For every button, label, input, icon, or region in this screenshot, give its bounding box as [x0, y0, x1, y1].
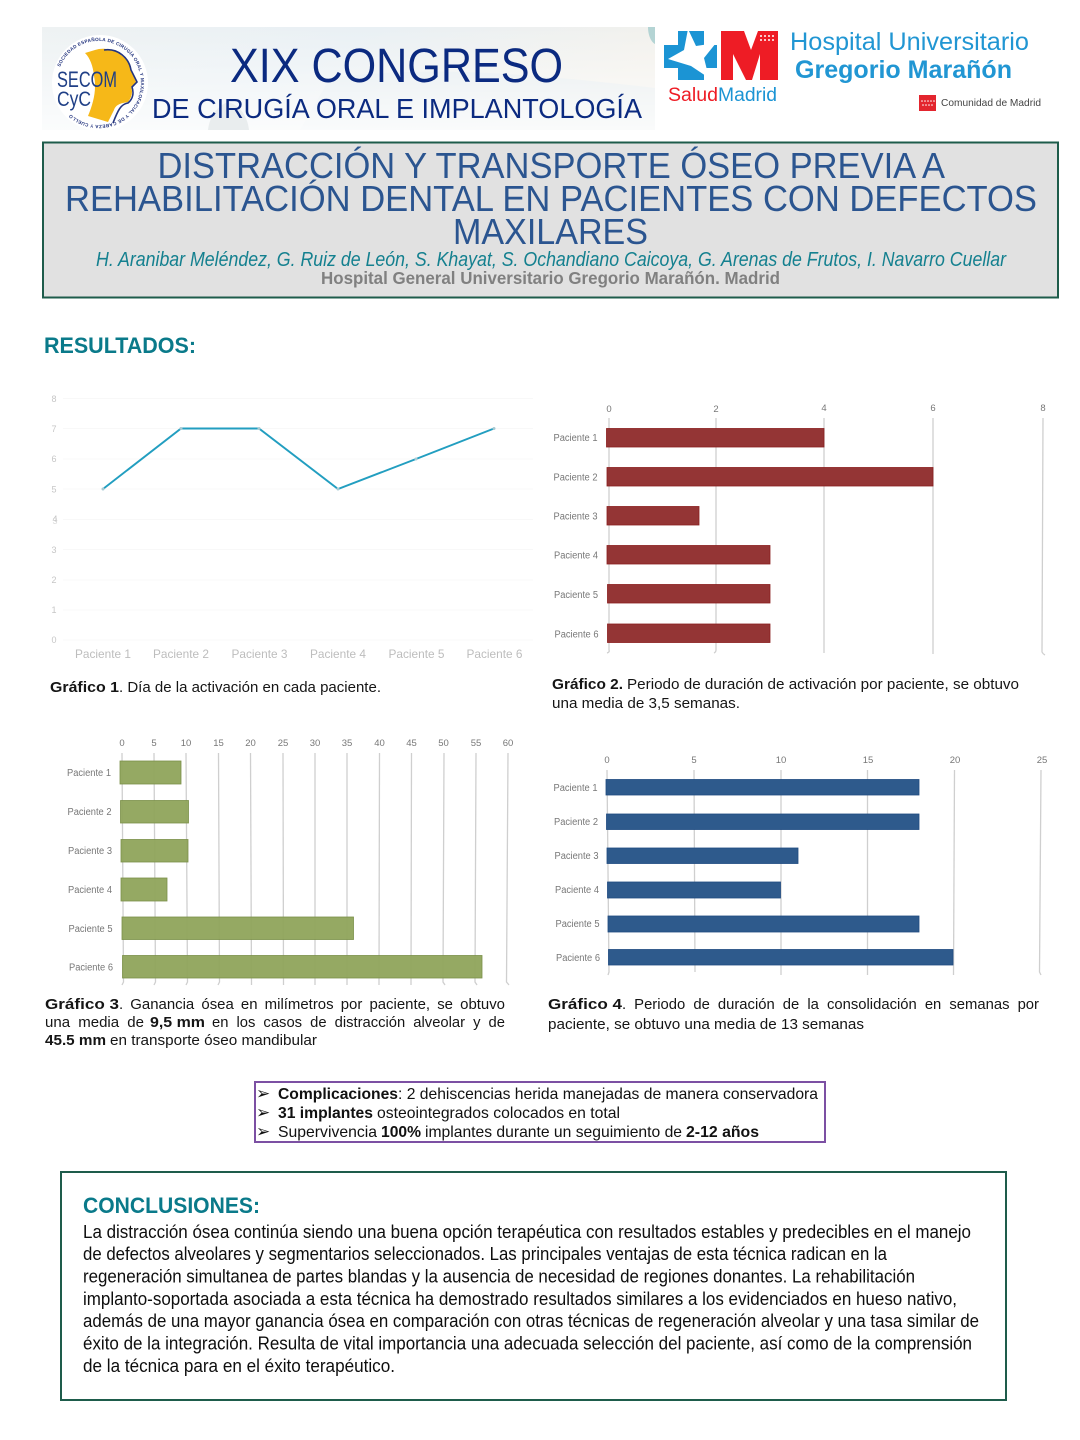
logo: SECOM CyC: CyC — [57, 88, 91, 111]
poster title: REHABILITACIÓN DENTAL EN PACIENTES CON DEFECTOS — [65, 178, 1037, 219]
Comunidad de Madrid logo — [919, 95, 1041, 111]
bar chart: duración de activación: Paciente 2 — [554, 472, 598, 484]
bullet line: complicaciones: : 2 dehiscencias herida manejadas de manera conservadora — [398, 1086, 818, 1103]
banner subtitle: DE CIRUGÍA ORAL E IMPLANTOLOGÍA — [152, 93, 642, 124]
bullet line: complicaciones: ➢ — [256, 1084, 270, 1104]
bar chart: ganancia ósea: Paciente 4 — [68, 885, 113, 896]
bullet line: supervivencia: 2-12 años — [686, 1124, 759, 1141]
caption: gráfico 3: Gráfico 3 — [45, 996, 119, 1013]
bar chart: ganancia ósea — [67, 738, 513, 985]
conclusions text: implanto-soportada asociada a esta técnica ha demostrado resultados similares a los evidenciados en hueso nativo, — [83, 1289, 957, 1309]
line chart: día de activación: Paciente 3 — [232, 647, 288, 661]
bar chart: ganancia ósea: 35 — [342, 738, 352, 749]
line chart: día de activación: Paciente 4 — [310, 647, 366, 661]
line chart: día de activación: 1 — [51, 605, 57, 615]
conclusions text: La distracción ósea continúa siendo una buena opción terapéutica con resultados estables y predecibles en el manejo — [83, 1222, 971, 1242]
caption: gráfico 2: Gráfico 2. — [552, 676, 623, 693]
Comunidad de Madrid logo: Comunidad de Madrid — [941, 97, 1041, 109]
bar chart: duración de activación — [554, 403, 1046, 655]
bar chart: ganancia ósea: 45 — [406, 738, 417, 749]
caption: gráfico 3 — [45, 996, 505, 1049]
bar chart: duración de consolidación: 10 — [776, 755, 786, 766]
poster title — [65, 145, 1037, 252]
hospital name — [790, 28, 1029, 84]
bar chart: ganancia ósea: 5 — [151, 738, 157, 749]
heading: resultados: RESULTADOS: — [44, 333, 196, 358]
caption: gráfico 2 — [552, 676, 1019, 712]
bar chart: duración de activación: Paciente 6 — [554, 630, 599, 640]
line chart: día de activación: Paciente 6 — [466, 647, 523, 661]
line chart: día de activación: 4 — [52, 514, 58, 524]
conclusions text: regeneración simultanea de partes blandas y la ausencia de necesidad de regiones donantes. La rehabilitación — [83, 1266, 915, 1286]
caption: gráfico 4: Gráfico 4 — [548, 996, 623, 1013]
caption: gráfico 4 — [548, 996, 1039, 1033]
bar chart: ganancia ósea: 15 — [213, 738, 224, 749]
bullet line: implantes — [256, 1103, 620, 1123]
line chart: día de activación: 6 — [51, 454, 57, 464]
conclusions text: de defectos alveolares y segmentarios seleccionados. Las principales ventajas de esta técnica radican en la — [83, 1244, 888, 1264]
SaludMadrid wordmark — [668, 85, 777, 106]
conclusions text: de la técnica para en el éxito terapéutico. — [83, 1356, 395, 1376]
caption: gráfico 3: . Ganancia ósea en milímetros por paciente, se obtuvo — [119, 996, 505, 1013]
bar chart: duración de consolidación: 0 — [604, 755, 610, 766]
bullet line: supervivencia — [256, 1122, 759, 1142]
bar chart: ganancia ósea: 20 — [245, 738, 256, 749]
caption: gráfico 2: una media de 3,5 semanas. — [552, 695, 740, 712]
line chart: día de activación: 2 — [51, 575, 57, 585]
line chart: día de activación: Paciente 2 — [153, 647, 209, 661]
bar chart: ganancia ósea: 30 — [310, 738, 320, 749]
bar chart: duración de consolidación: Paciente 4 — [555, 885, 600, 896]
bar chart: duración de activación: 0 — [606, 404, 612, 415]
bar chart: ganancia ósea: 40 — [374, 738, 385, 749]
line chart: día de activación: Paciente 5 — [388, 647, 445, 661]
line chart: día de activación: 8 — [51, 394, 57, 404]
caption: gráfico 2: Periodo de duración de activación por paciente, se obtuvo — [627, 676, 1019, 693]
bar chart: duración de activación: 4 — [821, 403, 827, 414]
bar chart: ganancia ósea: 55 — [471, 738, 481, 749]
conclusions text — [83, 1222, 979, 1376]
bullet line: complicaciones: Complicaciones — [278, 1086, 398, 1103]
bullet line: implantes: 31 implantes — [278, 1105, 373, 1122]
caption: gráfico 1: . Día de la activación en cada paciente. — [119, 679, 381, 696]
bar chart: duración de consolidación — [554, 755, 1047, 975]
bar chart: duración de activación: Paciente 1 — [554, 433, 598, 444]
heading: conclusiones: CONCLUSIONES: — [83, 1193, 260, 1218]
bar chart: duración de activación: 6 — [930, 403, 936, 414]
bullet line: supervivencia: implantes durante un seguimiento de — [425, 1124, 682, 1141]
bar chart: ganancia ósea: 10 — [181, 738, 191, 749]
bar chart: ganancia ósea: 25 — [278, 738, 288, 749]
hospital logos — [664, 28, 1041, 111]
bullet line: complicaciones — [256, 1084, 818, 1104]
callout: complicaciones e implantes — [255, 1082, 825, 1142]
bar chart: duración de consolidación: Paciente 1 — [554, 783, 598, 794]
bar chart: ganancia ósea: Paciente 5 — [68, 924, 113, 935]
bar chart: duración de activación: Paciente 5 — [554, 590, 599, 601]
icon: SaludMadrid cross — [664, 29, 717, 80]
bar chart: ganancia ósea: 60 — [503, 738, 513, 749]
bar chart: duración de consolidación: Paciente 5 — [556, 919, 600, 930]
hospital name: Gregorio Marañón — [795, 56, 1012, 84]
bullet line: supervivencia: ➢ — [256, 1122, 270, 1142]
bar chart: duración de activación: 8 — [1040, 403, 1046, 414]
line chart: día de activación: 7 — [51, 424, 57, 434]
panel: conclusiones — [61, 1172, 1006, 1400]
line chart: día de activación: 3 — [52, 516, 58, 526]
bar chart: ganancia ósea: Paciente 6 — [69, 962, 114, 974]
bullet line: implantes: osteointegrados colocados en total — [377, 1105, 620, 1122]
bar chart: duración de consolidación: Paciente 6 — [556, 953, 601, 964]
bar chart: duración de consolidación: 25 — [1037, 755, 1047, 766]
bar chart: duración de consolidación: Paciente 2 — [554, 817, 598, 828]
bar chart: duración de activación: Paciente 4 — [554, 550, 599, 562]
SaludMadrid wordmark: Salud — [668, 85, 718, 106]
bar chart: ganancia ósea: 0 — [119, 738, 125, 749]
line chart: día de activación: 0 — [51, 635, 57, 645]
icon: Madrid M — [721, 31, 778, 80]
conclusions text: además de una mayor ganancia ósea en comparación con otras técnicas de regeneración alveolar y una tasa similar de — [83, 1311, 979, 1331]
institution: Hospital General Universitario Gregorio Marañón. Madrid — [321, 268, 780, 288]
line chart: día de activación: 5 — [51, 484, 57, 494]
line chart: día de activación — [51, 394, 533, 661]
caption: gráfico 3: 45.5 mm — [45, 1032, 106, 1049]
line chart: día de activación: 3 — [51, 545, 57, 555]
conclusions text: éxito de la integración. Resulta de vital importancia una adecuada selección del paciente, así como de la comprensión — [83, 1334, 972, 1354]
bullet line: supervivencia: 100% — [381, 1124, 421, 1141]
bar chart: duración de consolidación: 20 — [950, 755, 960, 766]
bullet line: supervivencia: Supervivencia — [278, 1124, 377, 1141]
bar chart: duración de consolidación: 5 — [691, 755, 697, 766]
caption: gráfico 1: Gráfico 1 — [50, 679, 119, 696]
title panel — [43, 142, 1058, 298]
caption: gráfico 4: . Periodo de duración de la consolidación en semanas por — [622, 996, 1039, 1013]
caption: gráfico 3: una media de — [45, 1014, 144, 1031]
hospital name: Hospital Universitario — [790, 28, 1029, 56]
bar chart: duración de consolidación: 15 — [863, 755, 873, 766]
caption: gráfico 4: paciente, se obtuvo una media de 13 semanas — [548, 1016, 864, 1033]
bar chart: ganancia ósea: 50 — [438, 738, 449, 749]
logo: SECOM CyC: SOCIEDAD ESPAÑOLA DE CIRUGÍA ORAL Y MAXILOFACIAL Y DE CABEZA Y CUELLO — [58, 37, 144, 128]
bar chart: ganancia ósea: Paciente 3 — [68, 846, 113, 857]
SaludMadrid wordmark: Madrid — [718, 85, 777, 106]
bar chart: duración de consolidación: Paciente 3 — [554, 851, 599, 862]
congress banner — [42, 27, 655, 130]
banner title: XIX CONGRESO — [230, 40, 563, 93]
caption: gráfico 3: en transporte óseo mandibular — [110, 1032, 317, 1049]
bullet line: implantes: ➢ — [256, 1103, 270, 1123]
bar chart: duración de activación: 2 — [713, 404, 719, 415]
bar chart: ganancia ósea: Paciente 1 — [67, 768, 111, 779]
caption: gráfico 3: 9,5 mm — [150, 1014, 205, 1031]
line chart: día de activación: Paciente 1 — [75, 647, 131, 661]
logo: SECOM CyC: SECOM — [57, 67, 117, 92]
poster title: DISTRACCIÓN Y TRANSPORTE ÓSEO PREVIA A — [158, 145, 945, 186]
caption: gráfico 3: en los casos de distracción alveolar y de — [212, 1014, 505, 1031]
poster title: MAXILARES — [453, 211, 648, 252]
bar chart: duración de activación: Paciente 3 — [554, 512, 598, 522]
bar chart: ganancia ósea: Paciente 2 — [68, 807, 112, 818]
